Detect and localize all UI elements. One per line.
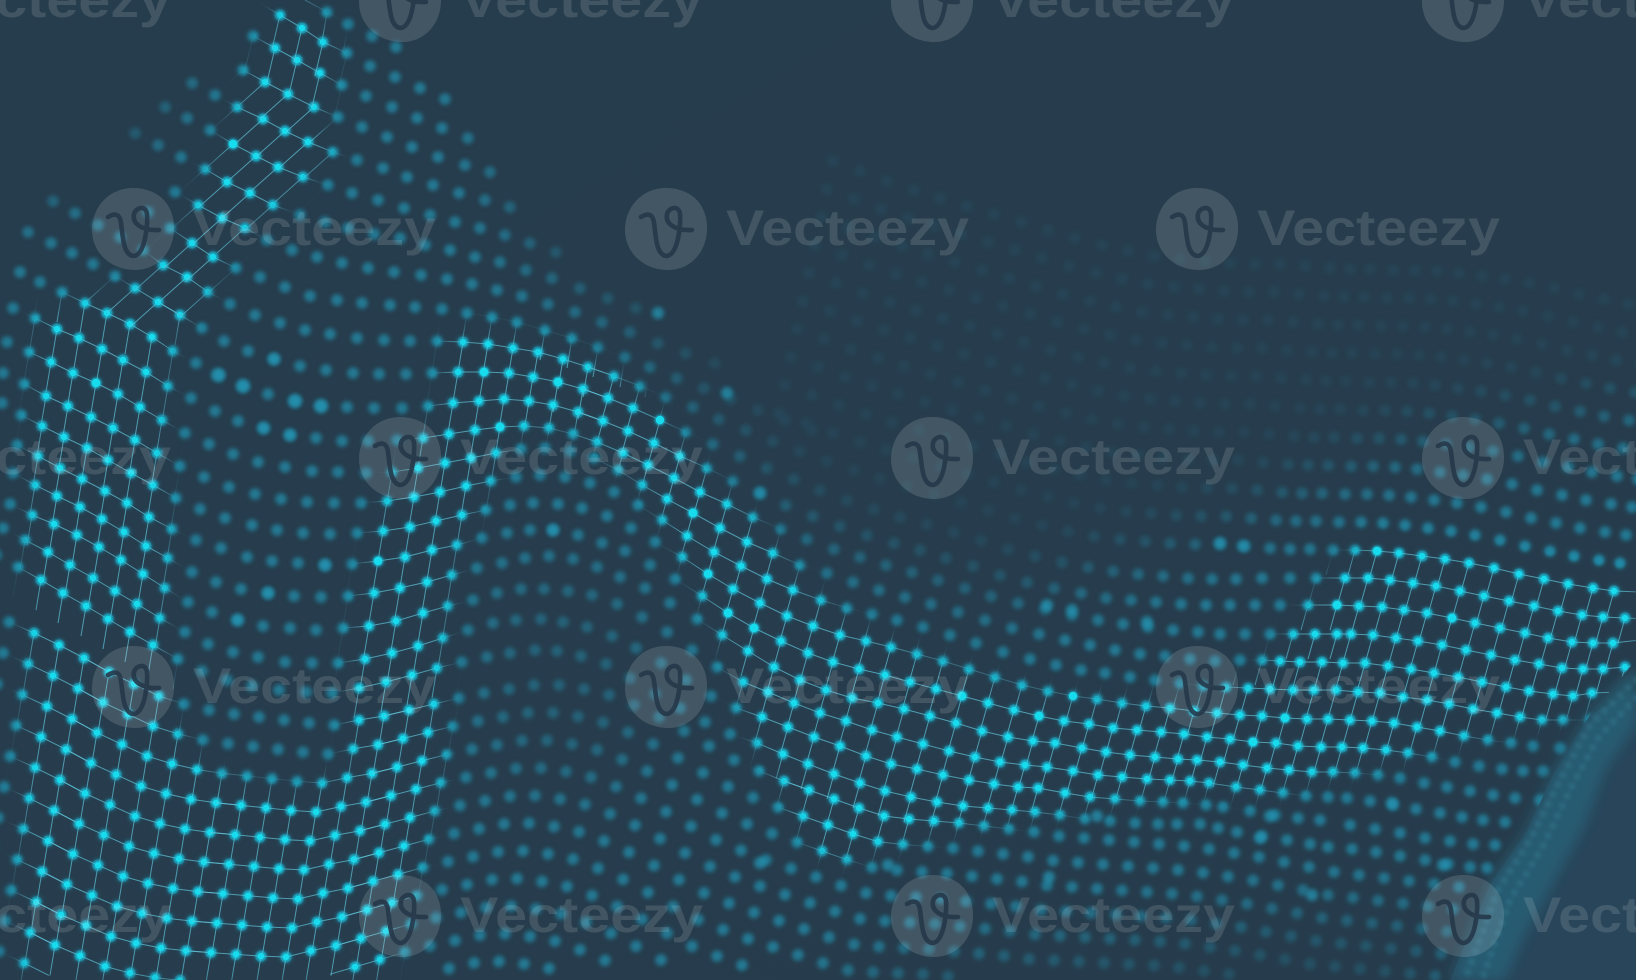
watermark: second row 2 (625, 188, 969, 270)
watermark: third row 2: Vecteezy (992, 429, 1235, 485)
watermark: second row 1 (92, 188, 436, 270)
watermark: fourth row 3: Vecteezy (1257, 658, 1500, 714)
watermark: third row 1: Vecteezy (460, 429, 703, 485)
dark fold at bottom right (1450, 665, 1636, 980)
watermark: second row 2: Vecteezy (726, 200, 969, 256)
watermark: fourth row 2: Vecteezy (726, 658, 969, 714)
watermark: second row 1: Vecteezy (193, 200, 436, 256)
watermark: fourth row 3 (1156, 646, 1500, 728)
larger out-of-focus dots (211, 307, 1449, 901)
watermark: third row 1 (359, 417, 703, 499)
watermark: bottom row 3 (1422, 875, 1636, 957)
larger bright nodes (92, 140, 1456, 746)
watermark: bottom row 2 (891, 875, 1235, 957)
watermark: second row 3: Vecteezy (1257, 200, 1500, 256)
watermark: fourth row 1: Vecteezy (193, 658, 436, 714)
watermark: fourth row 2 (625, 646, 969, 728)
watermark: bottom row 2: Vecteezy (992, 887, 1235, 943)
watermark: second row 3 (1156, 188, 1500, 270)
watermark: top row 3 (1422, 0, 1636, 42)
watermark: bottom row 1 (359, 875, 703, 957)
watermark: bottom row 1: Vecteezy (460, 887, 703, 943)
watermark: top row 2 (891, 0, 1235, 42)
watermark: third row 3 (1422, 417, 1636, 499)
watermark: fourth row 1 (92, 646, 436, 728)
watermark: third row 2 (891, 417, 1235, 499)
watermark: top row 1 (359, 0, 703, 42)
